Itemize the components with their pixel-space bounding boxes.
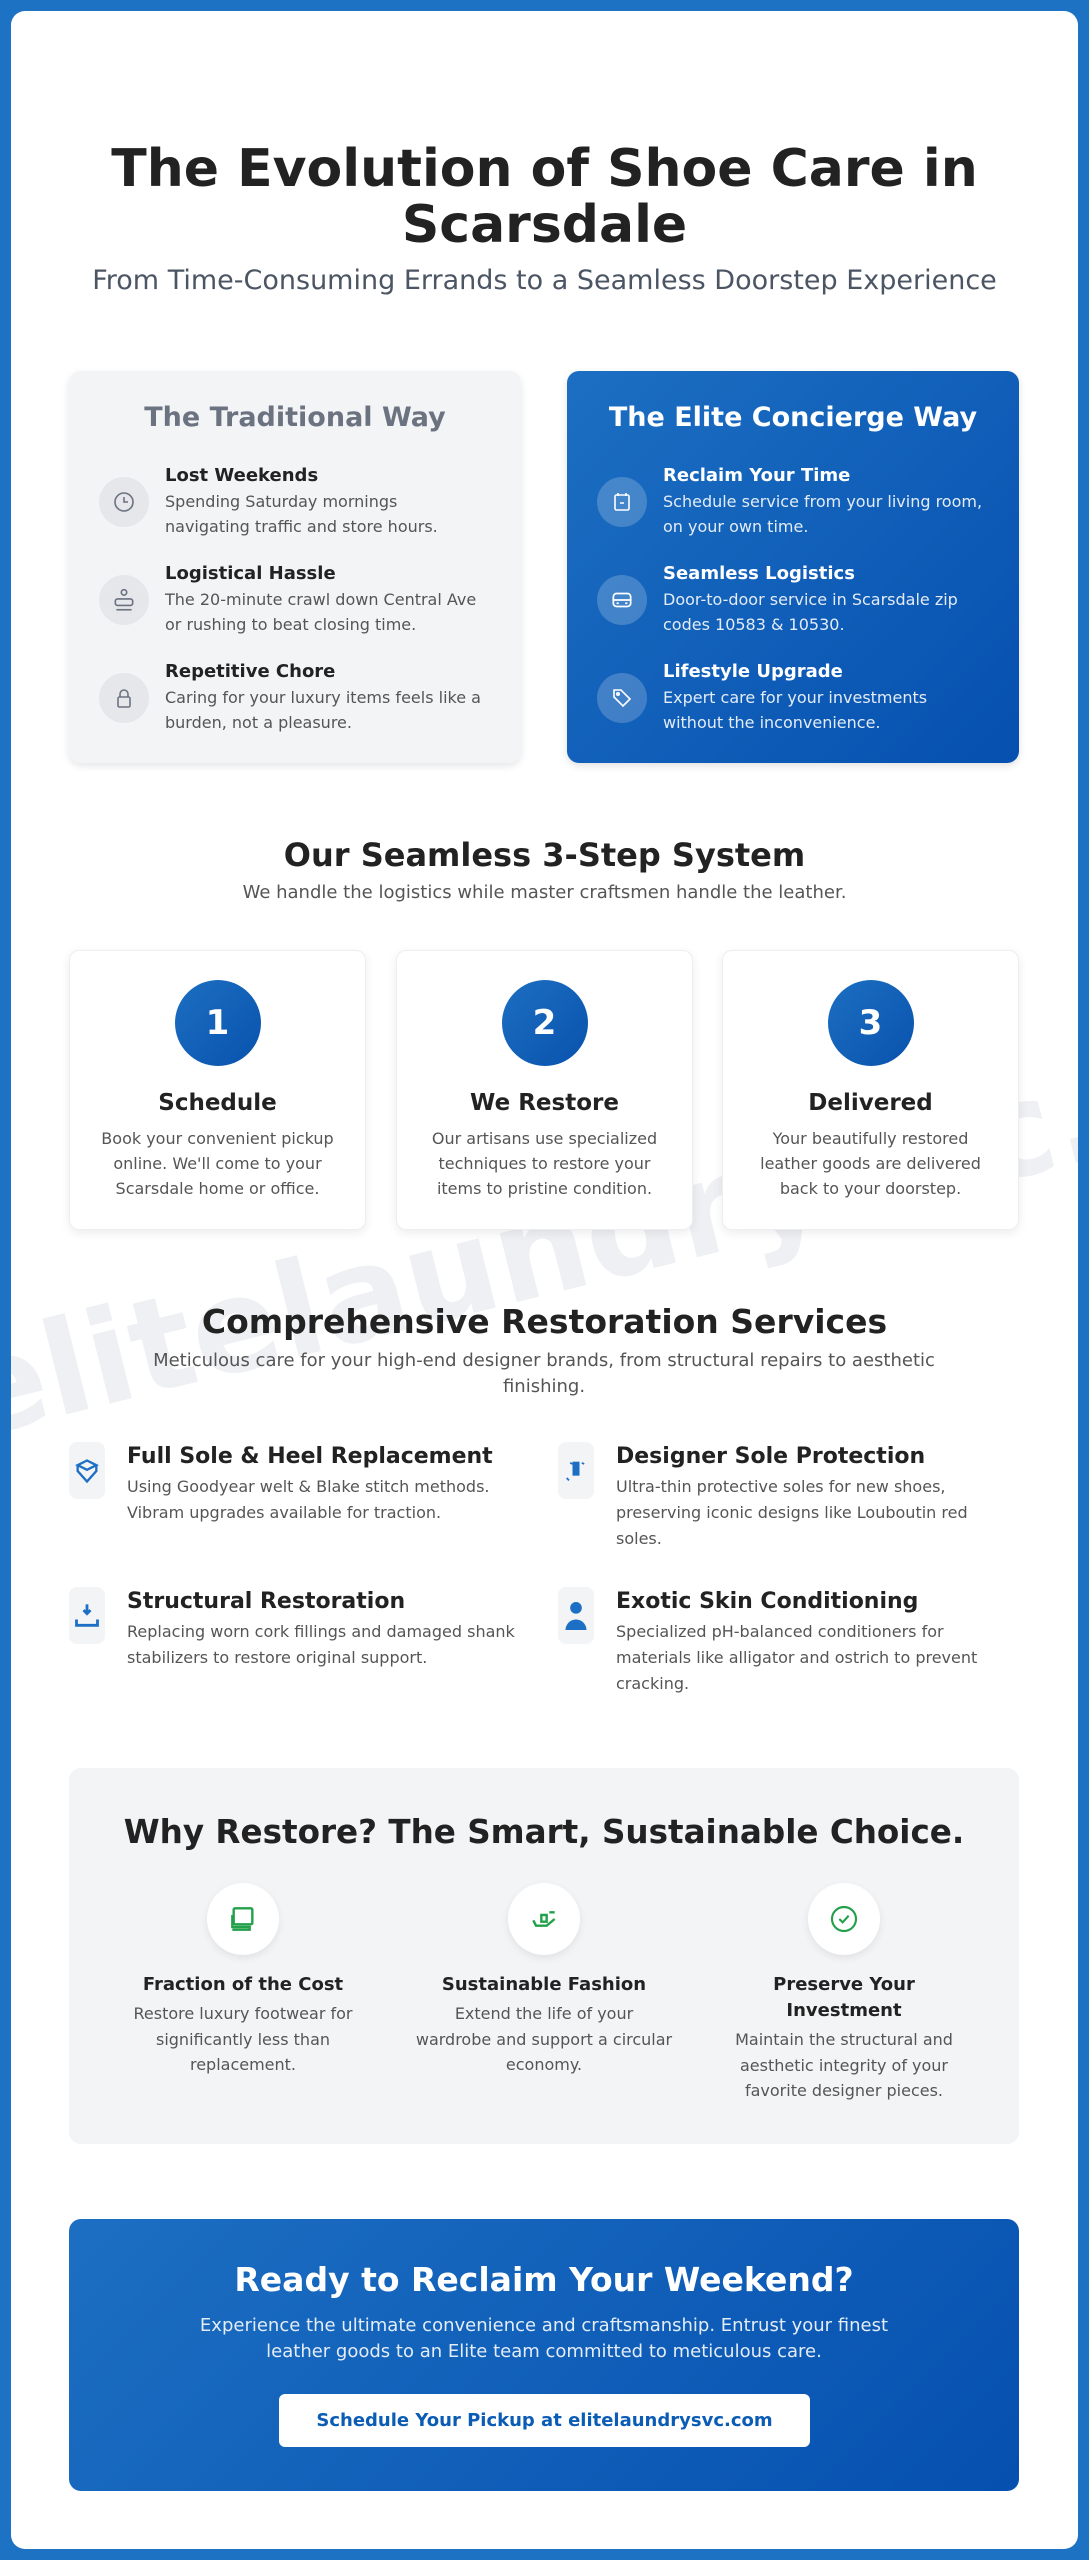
step 1: Book your convenient pickup online. We'll come to your Scarsdale home or office.	[101, 1129, 334, 1198]
cta heading: Ready to Reclaim Your Weekend?	[234, 2260, 854, 2299]
item: repetitive chore: Caring for your luxury items feels like a burden, not a pleasure.	[165, 688, 481, 732]
panel: elite concierge way	[567, 371, 1019, 763]
heading: elite: The Elite Concierge Way	[609, 402, 977, 433]
step 2	[396, 950, 693, 1230]
heading: restoration services: Comprehensive Restoration Services	[202, 1302, 887, 1341]
step 2: Our artisans use specialized techniques to restore your items to pristine condition.	[432, 1129, 657, 1198]
heading: 3-step system: Our Seamless 3-Step System	[284, 836, 805, 874]
item: lifestyle upgrade: Expert care for your investments without the inconvenience.	[663, 688, 927, 732]
step 3: Delivered	[808, 1090, 933, 1116]
title	[111, 139, 978, 255]
benefit: preserve investment: Maintain the structural and aesthetic integrity of your favorite designer pieces.	[735, 2030, 953, 2100]
benefit: preserve investment: Investment	[786, 2000, 902, 2021]
step 3: 3	[859, 1003, 882, 1043]
item: lost weekends	[99, 465, 438, 536]
step 1: 1	[206, 1003, 229, 1043]
benefit: sustainable fashion: wardrobe and support a circular	[416, 2030, 672, 2048]
item: lifestyle upgrade: Lifestyle Upgrade	[663, 661, 843, 682]
step 3	[722, 950, 1019, 1230]
benefit: fraction of cost	[133, 1883, 352, 2074]
service: structural restoration: Replacing worn cork fillings and damaged shank stabilizers to restore original support.	[127, 1622, 515, 1667]
step 1: Schedule	[158, 1090, 277, 1116]
benefit: fraction of cost: Fraction of the Cost	[143, 1974, 343, 1995]
step 3: Your beautifully restored leather goods are delivered back to your doorstep.	[760, 1129, 981, 1198]
subtitle: From Time-Consuming Errands to a Seamless Doorstep Experience	[92, 265, 997, 296]
service: full sole: Full Sole & Heel Replacement	[127, 1444, 493, 1469]
service: exotic skin conditioning	[558, 1587, 977, 1693]
service: exotic skin conditioning: Specialized pH-balanced conditioners for materials like alligator and ostrich to prevent cracking.	[616, 1622, 977, 1693]
panel: call to action	[69, 2219, 1019, 2491]
item: logistical hassle	[99, 563, 476, 634]
title: Scarsdale	[402, 195, 687, 255]
title: The Evolution of Shoe Care in	[111, 139, 978, 199]
item: logistical hassle: Logistical Hassle	[165, 563, 336, 584]
item: lost weekends: Spending Saturday mornings navigating traffic and store hours.	[165, 492, 438, 536]
panel: traditional way	[69, 371, 521, 763]
benefit: sustainable fashion: Sustainable Fashion	[442, 1974, 646, 1995]
heading: traditional: The Traditional Way	[144, 402, 446, 433]
item: reclaim time: Reclaim Your Time	[663, 465, 850, 486]
service: full sole	[69, 1442, 493, 1522]
benefit: sustainable fashion: economy.	[506, 2055, 582, 2074]
service: designer sole protection: Ultra-thin protective soles for new shoes, preserving iconic designs like Louboutin red soles.	[616, 1477, 968, 1548]
item: lost weekends: Lost Weekends	[165, 465, 318, 486]
subheading: services: Meticulous care for your high-end designer brands, from structural repairs to aesthetic finishing.	[153, 1350, 935, 1397]
panel: why restore	[69, 1768, 1019, 2144]
step 1	[69, 950, 366, 1230]
service: designer sole protection	[558, 1442, 968, 1548]
cta button	[279, 2394, 810, 2447]
item: repetitive chore: Repetitive Chore	[165, 661, 335, 682]
item: logistical hassle: The 20-minute crawl down Central Ave or rushing to beat closing time.	[165, 590, 476, 634]
item: reclaim time: Schedule service from your living room, on your own time.	[663, 492, 982, 536]
service: structural restoration	[69, 1587, 515, 1667]
service: exotic skin conditioning: Exotic Skin Conditioning	[616, 1589, 918, 1614]
item: reclaim time	[597, 465, 982, 536]
benefit: preserve investment	[735, 1883, 953, 2100]
cta text: Experience the ultimate convenience and craftsmanship. Entrust your finest leather goods to an Elite team committed to meticulous care.	[200, 2315, 888, 2362]
benefit: sustainable fashion: Extend the life of your	[455, 2004, 633, 2023]
benefit: preserve investment: Preserve Your	[773, 1974, 915, 1995]
step 2: 2	[533, 1003, 556, 1043]
benefit: fraction of cost: Restore luxury footwear for significantly less than replacement.	[133, 2004, 352, 2074]
item: seamless logistics: Door-to-door service in Scarsdale zip codes 10583 & 10530.	[663, 590, 958, 634]
service: full sole: Using Goodyear welt & Blake stitch methods. Vibram upgrades available for traction.	[127, 1477, 490, 1522]
cta button: Schedule Your Pickup at elitelaundrysvc.com	[316, 2410, 773, 2431]
item: seamless logistics	[597, 563, 958, 634]
service: structural restoration: Structural Restoration	[127, 1589, 405, 1614]
service: designer sole protection: Designer Sole Protection	[616, 1444, 925, 1469]
item: seamless logistics: Seamless Logistics	[663, 563, 855, 584]
item: repetitive chore	[99, 661, 481, 732]
item: lifestyle upgrade	[597, 661, 927, 732]
subheading: 3-step: We handle the logistics while master craftsmen handle the leather.	[243, 882, 846, 903]
heading: why restore: Why Restore? The Smart, Sustainable Choice.	[124, 1813, 964, 1851]
benefit: sustainable fashion	[416, 1883, 672, 2074]
step 2: We Restore	[470, 1090, 619, 1116]
